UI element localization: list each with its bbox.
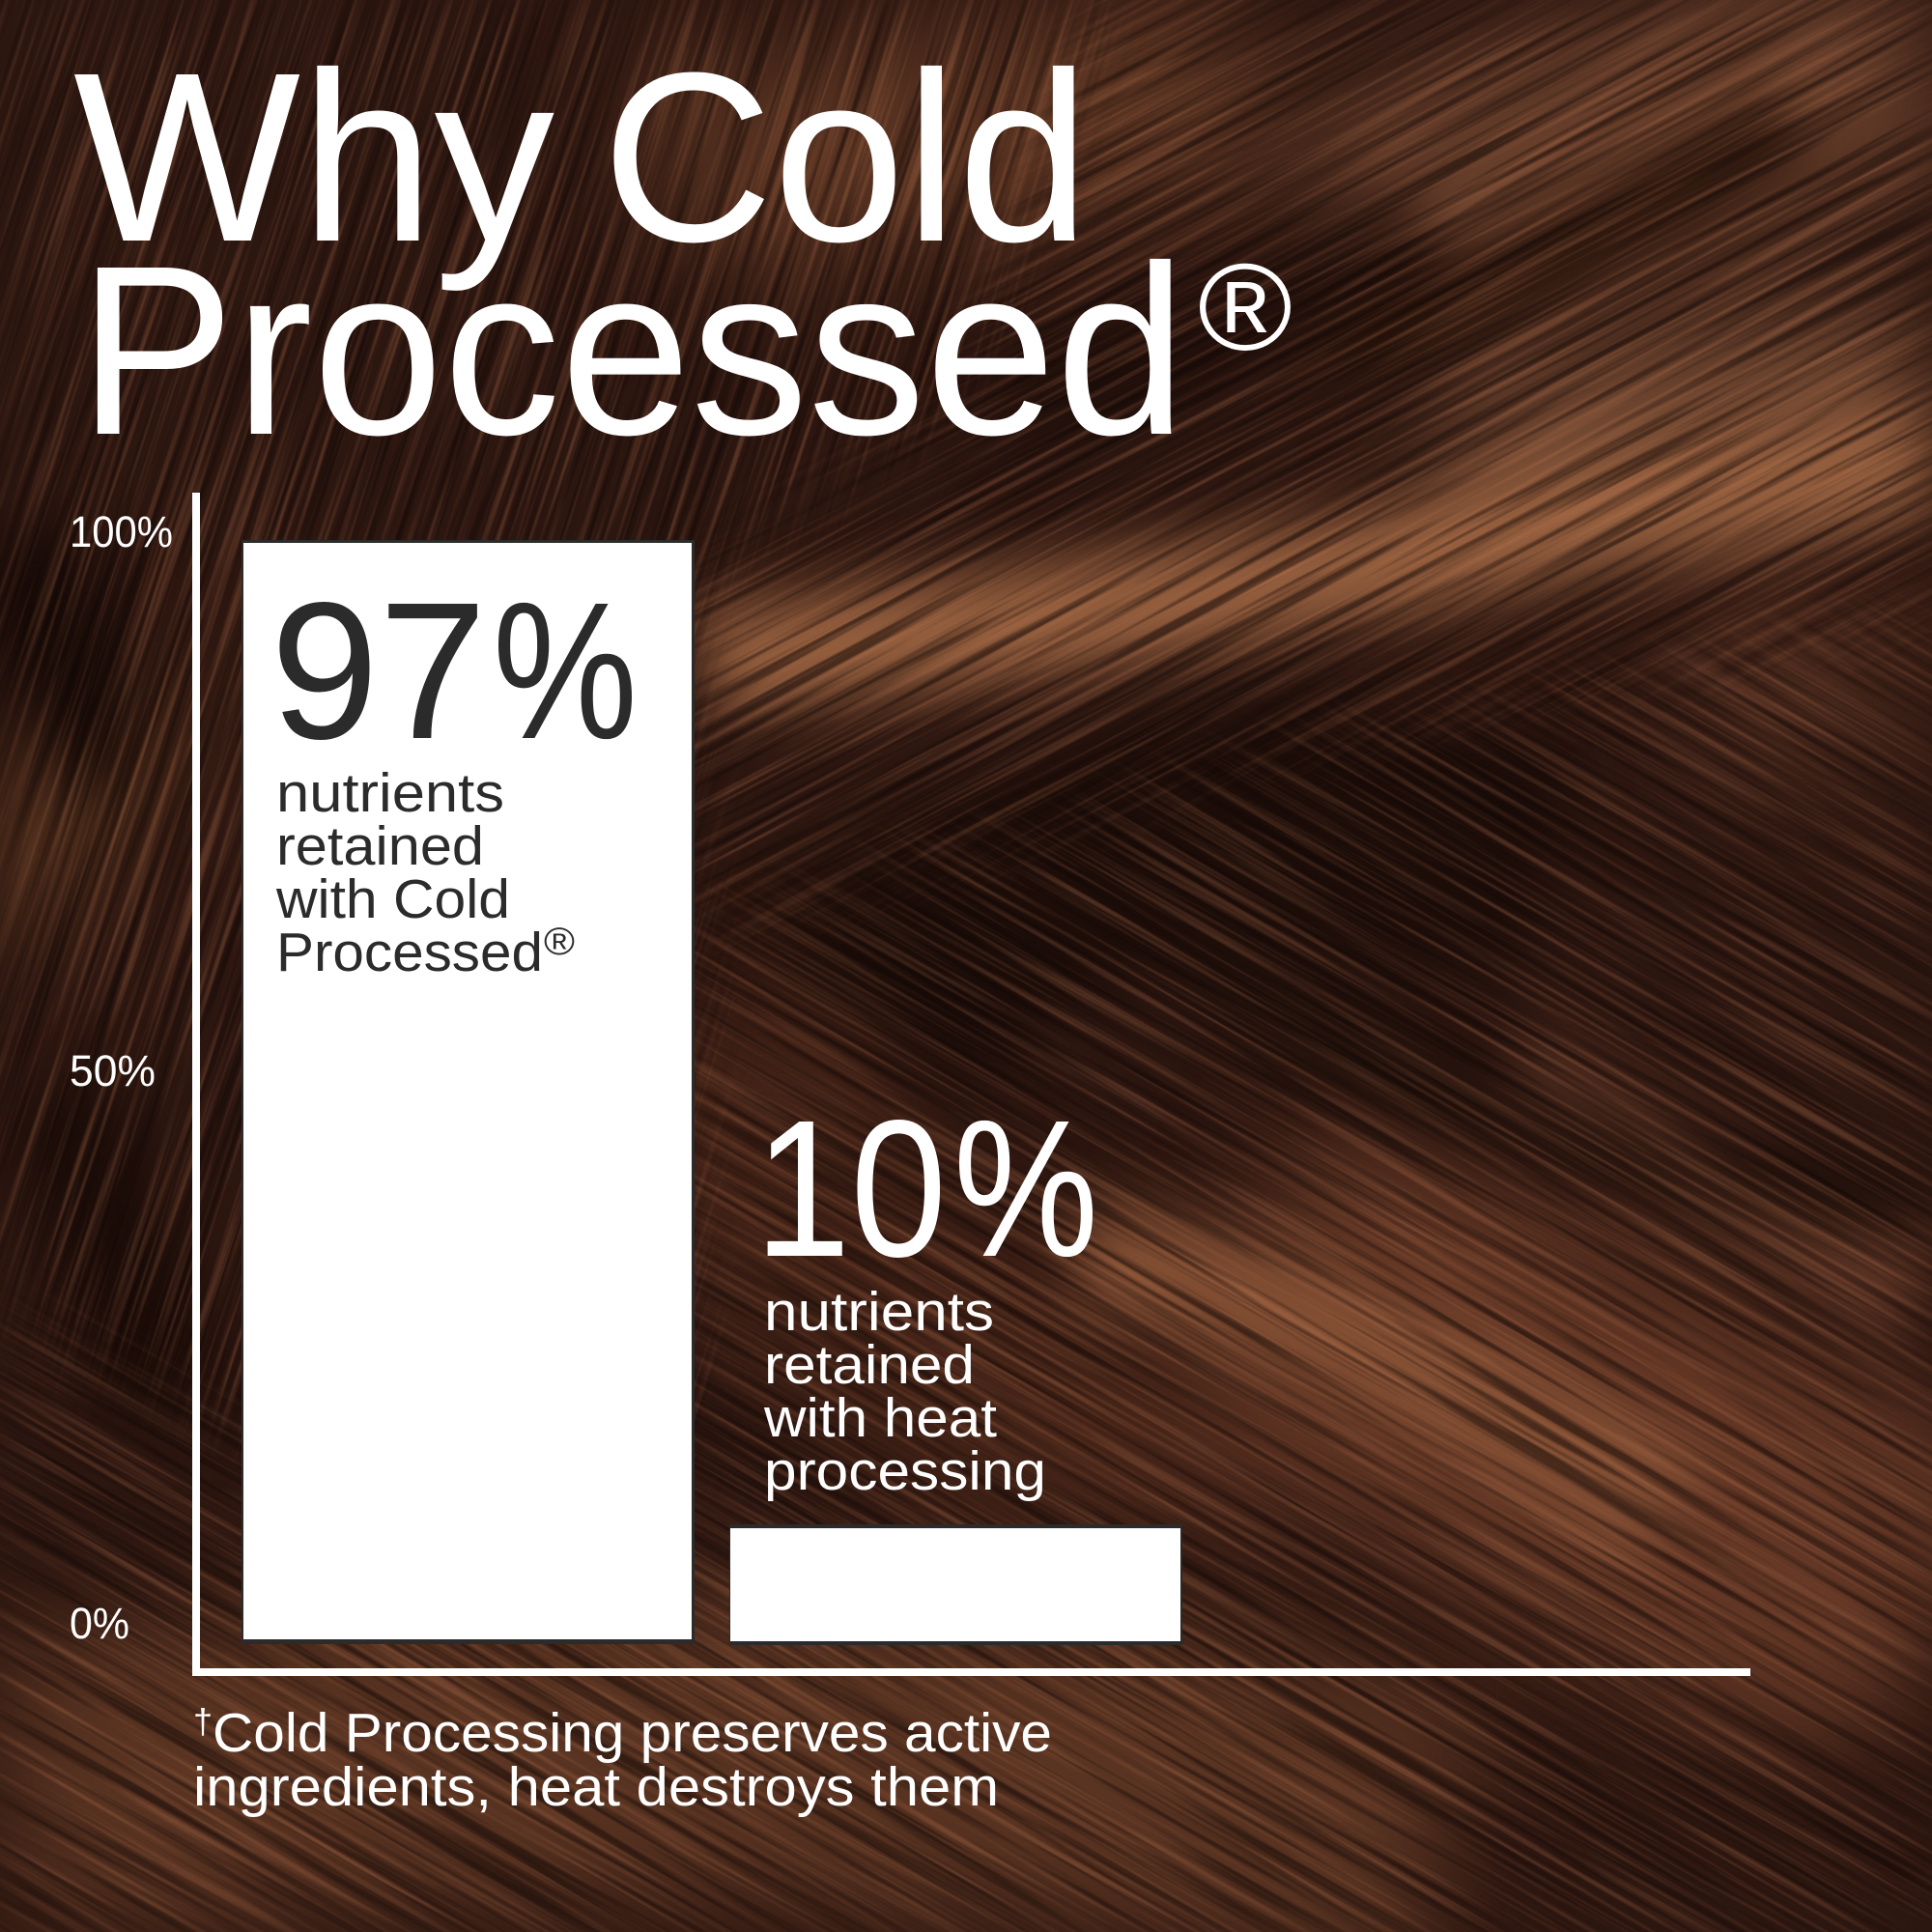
label: nutrients retained with heat processing: nutrients — [764, 1281, 994, 1343]
bar: cold processed 97% — [242, 540, 695, 1644]
title: Processed — [78, 215, 1186, 485]
footnote: † — [193, 1701, 213, 1741]
y axis labels — [70, 507, 173, 1648]
label: nutrients retained with heat processing — [763, 1281, 1046, 1502]
label: nutrients retained with Cold Processed: with Cold — [275, 868, 510, 930]
footnote: Cold Processing preserves active — [213, 1702, 1052, 1764]
label: nutrients retained with Cold Processed: retained — [276, 815, 484, 877]
label: nutrients retained with heat processing: processing — [764, 1440, 1046, 1502]
title: ® — [1198, 239, 1293, 377]
title: Cold — [602, 22, 1090, 292]
footnote — [193, 1701, 1052, 1818]
label: nutrients retained with Cold Processed: ® — [544, 921, 575, 963]
label: nutrients retained with Cold Processed — [275, 762, 575, 983]
label: nutrients retained with heat processing: retained — [764, 1334, 975, 1396]
title: Why — [73, 22, 554, 292]
chart axes — [192, 493, 1750, 1676]
stat: 97%: 97 — [270, 561, 487, 780]
label: nutrients retained with Cold Processed: Processed — [276, 922, 543, 983]
label: nutrients retained with heat processing: with heat — [763, 1387, 997, 1449]
stat: 10% — [754, 1079, 1098, 1297]
stat: 10%: % — [953, 1079, 1098, 1297]
y axis labels: 100% — [70, 507, 173, 556]
y axis labels: 50% — [70, 1046, 156, 1095]
stat: 10%: 10 — [754, 1079, 947, 1297]
stat: 97%: % — [493, 561, 638, 780]
label: nutrients retained with Cold Processed: nutrients — [276, 762, 504, 824]
title — [73, 22, 1293, 485]
stat: 97% — [270, 561, 638, 780]
footnote: ingredients, heat destroys them — [193, 1756, 999, 1818]
y axis labels: 0% — [70, 1599, 129, 1648]
bar: heat processing 10% — [729, 1524, 1182, 1645]
